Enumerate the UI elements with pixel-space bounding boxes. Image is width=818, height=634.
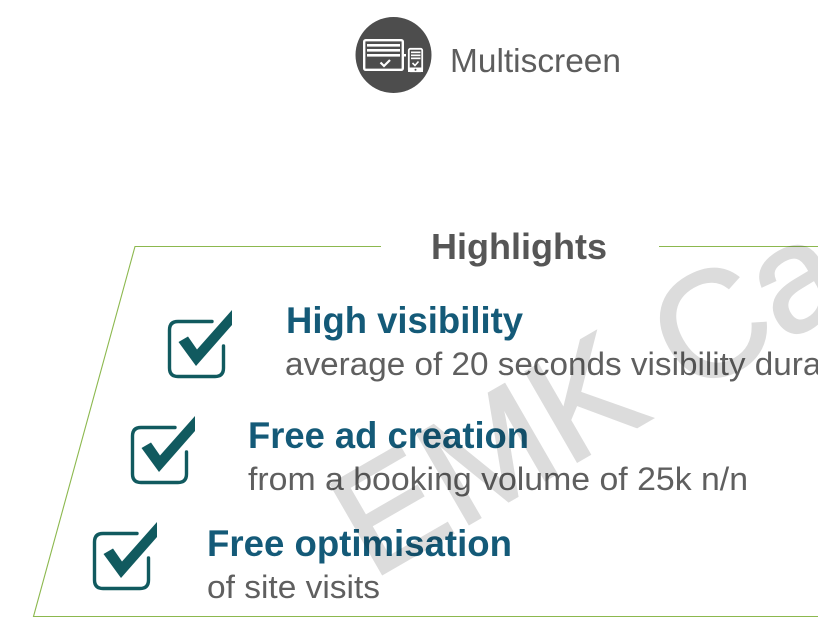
- icon: checkbox: [94, 522, 157, 588]
- icon: checkbox: [132, 416, 195, 482]
- item: high visibility: [170, 300, 818, 382]
- highlights frame: [34, 246, 818, 616]
- item: free ad creation: [132, 415, 748, 497]
- icon: multiscreen devices: [356, 17, 432, 93]
- item: free optimisation: [94, 522, 512, 605]
- item description: of site visits: [207, 569, 380, 605]
- item title: Free optimisation: [207, 523, 512, 564]
- item description: from a booking volume of 25k n/n: [248, 461, 748, 497]
- heading: Highlights: Highlights: [431, 226, 607, 267]
- item title: Free ad creation: [248, 415, 529, 456]
- icon: checkbox: [170, 310, 232, 376]
- label: Multiscreen: Multiscreen: [450, 42, 621, 79]
- item title: High visibility: [286, 300, 523, 341]
- multiscreen badge: [356, 17, 621, 93]
